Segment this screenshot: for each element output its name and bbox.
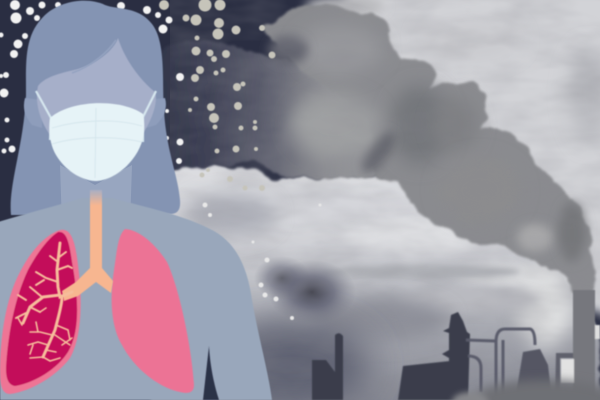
hair <box>11 1 180 215</box>
arm gap <box>203 346 219 400</box>
left lung outer <box>0 230 81 394</box>
fringe highlight <box>72 40 116 73</box>
panel: smoky sky <box>305 0 600 320</box>
right lung <box>112 229 194 393</box>
ground smoke <box>452 380 600 400</box>
factory silhouette <box>312 312 577 400</box>
lungs <box>0 229 194 394</box>
trachea <box>62 190 113 301</box>
smoke texture <box>170 0 600 400</box>
mask straps <box>36 91 156 142</box>
far unit <box>515 349 552 400</box>
smoke lobe left <box>150 41 395 179</box>
icon: face mask <box>36 91 156 181</box>
lower pale cloud <box>150 165 600 400</box>
bronchial tree <box>16 243 72 361</box>
smoke plume <box>262 5 594 300</box>
dark smoke puff <box>254 256 356 324</box>
woman figure <box>0 1 272 400</box>
main chimney <box>561 290 600 400</box>
left chimney block <box>312 333 343 400</box>
low building <box>398 361 450 400</box>
face <box>37 38 156 178</box>
ear shapes <box>24 98 166 128</box>
mask pleats <box>52 108 142 178</box>
body <box>0 198 272 400</box>
pipes <box>466 329 535 400</box>
neck <box>60 165 132 225</box>
left lung diseased <box>6 232 77 386</box>
mask body <box>49 103 144 181</box>
refinery tower <box>442 312 470 400</box>
pollution particles <box>0 0 322 320</box>
